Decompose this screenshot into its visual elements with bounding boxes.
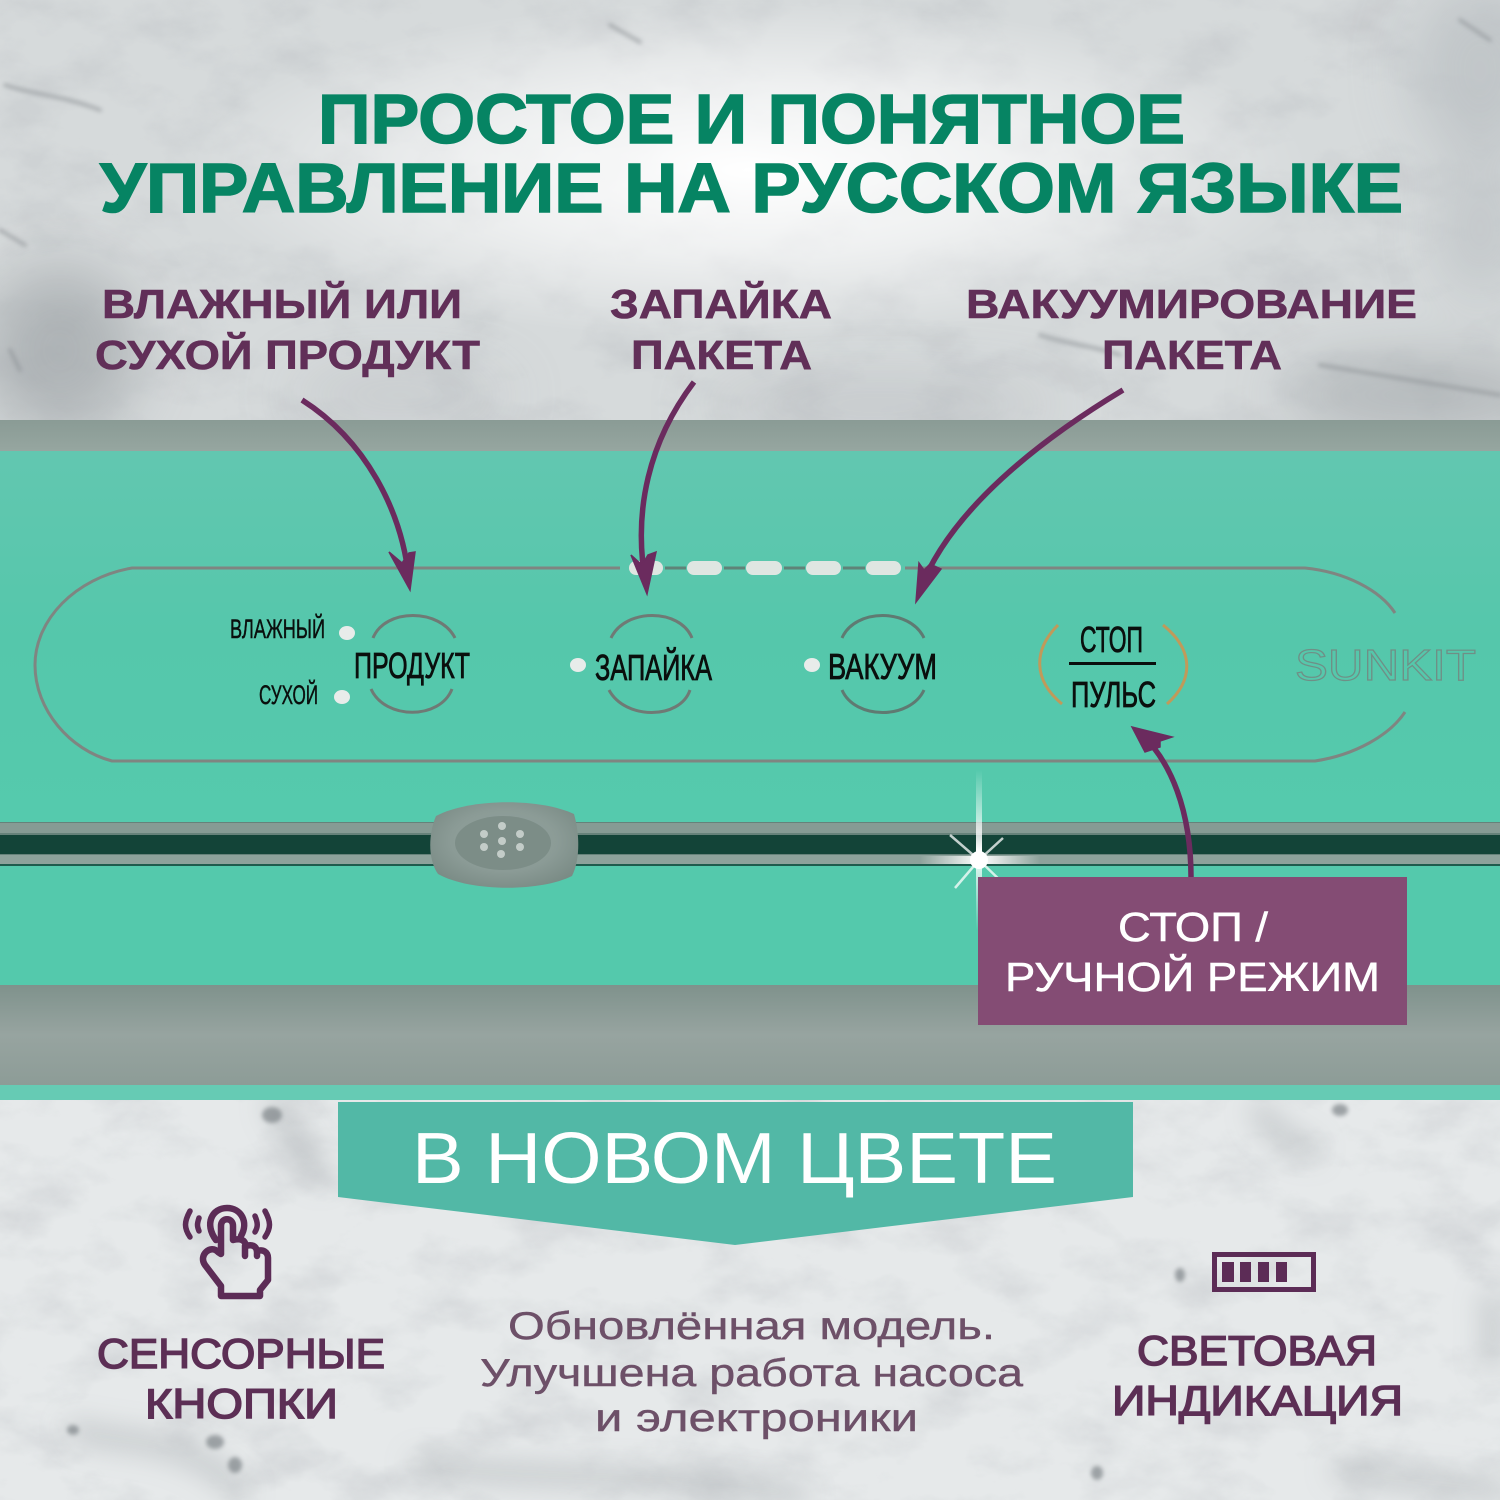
button: stop / pulse: ПУЛЬС [1071,674,1156,715]
button: sealing [570,616,712,712]
feature: light indication: СВЕТОВАЯ [1137,1327,1377,1374]
device body [0,420,1500,1100]
callout: stop / manual mode: СТОП / [1118,904,1269,950]
description text: Улучшена работа насоса [480,1352,1023,1395]
button: product: ПРОДУКТ [354,645,470,686]
upper teal control panel [0,451,1500,823]
description text: Обновлённая модель. [508,1305,995,1348]
label: wet or dry product: СУХОЙ ПРОДУКТ [95,332,480,378]
bottom teal strip [0,1085,1500,1100]
slider groove [0,822,1500,866]
label: bag vacuuming: ПАКЕТА [1102,332,1282,378]
feature: touch buttons [97,1330,385,1427]
button: vacuum: ВАКУУМ [828,646,937,687]
feature: light indication [1112,1327,1403,1424]
upper grey rail [0,420,1500,451]
label: bag sealing: ЗАПАЙКА [610,281,832,327]
callout: stop / manual mode: РУЧНОЙ РЕЖИМ [1005,954,1380,1000]
slider button [430,802,578,888]
banner: in a new colour [338,1102,1133,1245]
control panel outline [35,568,1405,761]
button: stop / pulse [1040,619,1187,715]
description text [480,1305,1023,1440]
button: product: ВЛАЖНЫЙ [230,613,325,644]
lower grey rail [0,985,1500,1085]
arrow: to stop [1132,727,1191,883]
feature: light indication: ИНДИКАЦИЯ [1112,1377,1403,1424]
title [100,80,1403,227]
label: bag sealing: ПАКЕТА [631,332,812,378]
label: wet or dry product: ВЛАЖНЫЙ ИЛИ [102,281,462,327]
indicator pills [629,561,901,575]
banner: in a new colour: В НОВОМ ЦВЕТЕ [412,1119,1057,1199]
arrow: to vacuum [916,390,1123,602]
feature: touch buttons: СЕНСОРНЫЕ [97,1330,385,1377]
button: product: СУХОЙ [259,679,318,710]
label: wet or dry product [95,281,480,378]
feature: touch buttons: КНОПКИ [145,1380,338,1427]
arrow: to product [302,400,415,590]
icon: touch hand [186,1208,270,1296]
title: ПРОСТОЕ И ПОНЯТНОЕ [318,80,1185,158]
lower teal panel [0,865,1500,985]
sparkle [920,770,1040,930]
arrow: to sealing [631,382,694,594]
label: bag vacuuming [966,281,1417,378]
description text: и электроники [595,1397,918,1440]
label: bag vacuuming: ВАКУУМИРОВАНИЕ [966,281,1417,327]
callout: stop / manual mode [978,877,1407,1025]
button: sealing: ЗАПАЙКА [595,646,712,688]
icon: light indicator [1214,1254,1314,1290]
button: vacuum [804,616,937,712]
label: bag sealing [610,281,832,378]
button: stop / pulse: СТОП [1080,619,1143,660]
title: УПРАВЛЕНИЕ НА РУССКОМ ЯЗЫКЕ [100,149,1403,227]
button: product [230,613,470,712]
brand logo: SUNKIT [1295,641,1476,690]
